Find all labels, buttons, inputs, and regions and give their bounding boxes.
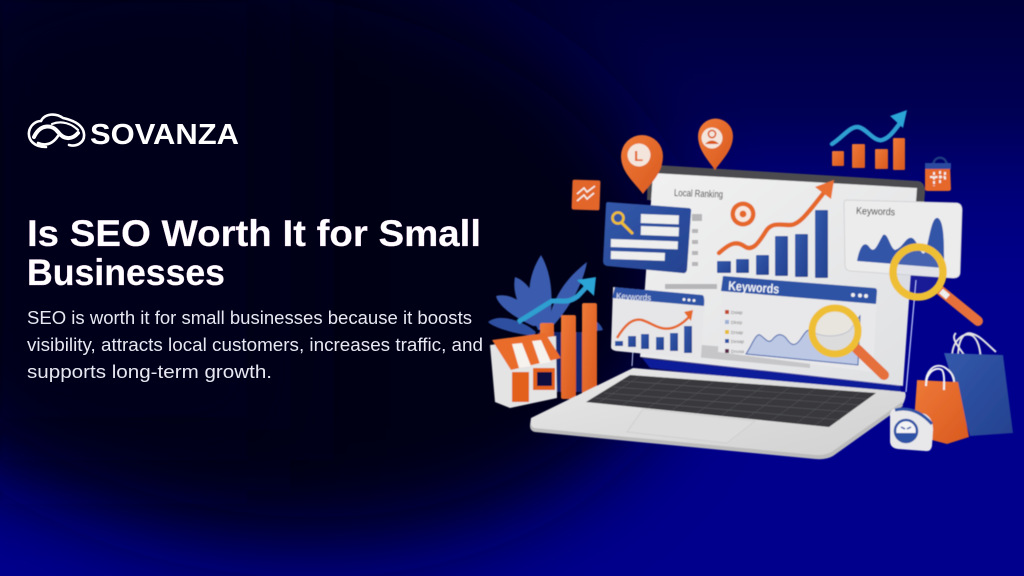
description text: visibility, attracts local customers, increases traffic, and: [27, 334, 483, 355]
icon: shop: [490, 333, 561, 408]
arrow: orange line: [617, 316, 690, 338]
icon: magnifier: [612, 212, 632, 233]
text: Keywords header: Keywords: [616, 291, 652, 303]
laptop base: [530, 368, 906, 459]
bar chart: ranking: [717, 210, 828, 278]
title: Is SEO Worth It for Small: [27, 213, 481, 254]
icon: magnifying glass on right card: [893, 247, 978, 321]
legend: Desap: [731, 339, 745, 344]
ranking list placeholder lines: [665, 214, 717, 289]
illustration: laptop and SEO elements: [488, 110, 1013, 459]
icon: location pin L: [621, 135, 663, 194]
laptop screen: [632, 165, 925, 395]
panel: right keywords card: [844, 200, 962, 278]
icon: cloud logo mark: [29, 115, 84, 147]
bar chart: [615, 326, 692, 353]
arrow: orange growth line: [719, 180, 834, 253]
icon: gear badge: [730, 202, 756, 226]
icon: location pin user: [698, 118, 733, 170]
icon: location pin L: L: [634, 148, 643, 165]
title: [27, 213, 481, 293]
legend: Dksip: [731, 320, 743, 325]
logo: Sovanza: [29, 115, 239, 151]
icon: magnifying glass on center card: [812, 308, 884, 375]
legend: Dnosa: [731, 349, 745, 354]
chart: area line: [746, 316, 860, 365]
panel: left keywords card: [611, 287, 705, 359]
icon: orange trend tile: [571, 180, 601, 210]
keyboard: [586, 375, 876, 427]
text: Keywords header: Keywords: [728, 278, 780, 297]
icon: small shopping bag: [925, 158, 951, 191]
panel: blue search card: [603, 202, 691, 273]
icon: shopping bags: [913, 333, 1013, 444]
description text: supports long-term growth.: [27, 361, 272, 382]
text: Keywords: Keywords: [856, 206, 895, 218]
chart: orange bars behind shop: [540, 303, 597, 401]
legend: [725, 310, 745, 354]
icon: blue square badge: [890, 408, 933, 451]
arrow: teal arrow over plant: [518, 277, 596, 322]
wordmark: SOVANZA: [90, 119, 239, 151]
icon: blue plant: [488, 255, 603, 392]
panel: center keywords card: [718, 276, 877, 372]
chart: area: [857, 218, 944, 268]
touchpad: [627, 409, 755, 443]
description text: SEO is worth it for small businesses because it boosts: [27, 307, 472, 328]
description text: [27, 307, 483, 382]
title: Businesses: [27, 252, 225, 293]
legend: Dsiap: [731, 310, 743, 315]
chart: floating bars with blue arrow: [832, 110, 907, 170]
legend: Drsap: [731, 330, 744, 335]
text: Local Ranking: Local Ranking: [674, 188, 723, 201]
